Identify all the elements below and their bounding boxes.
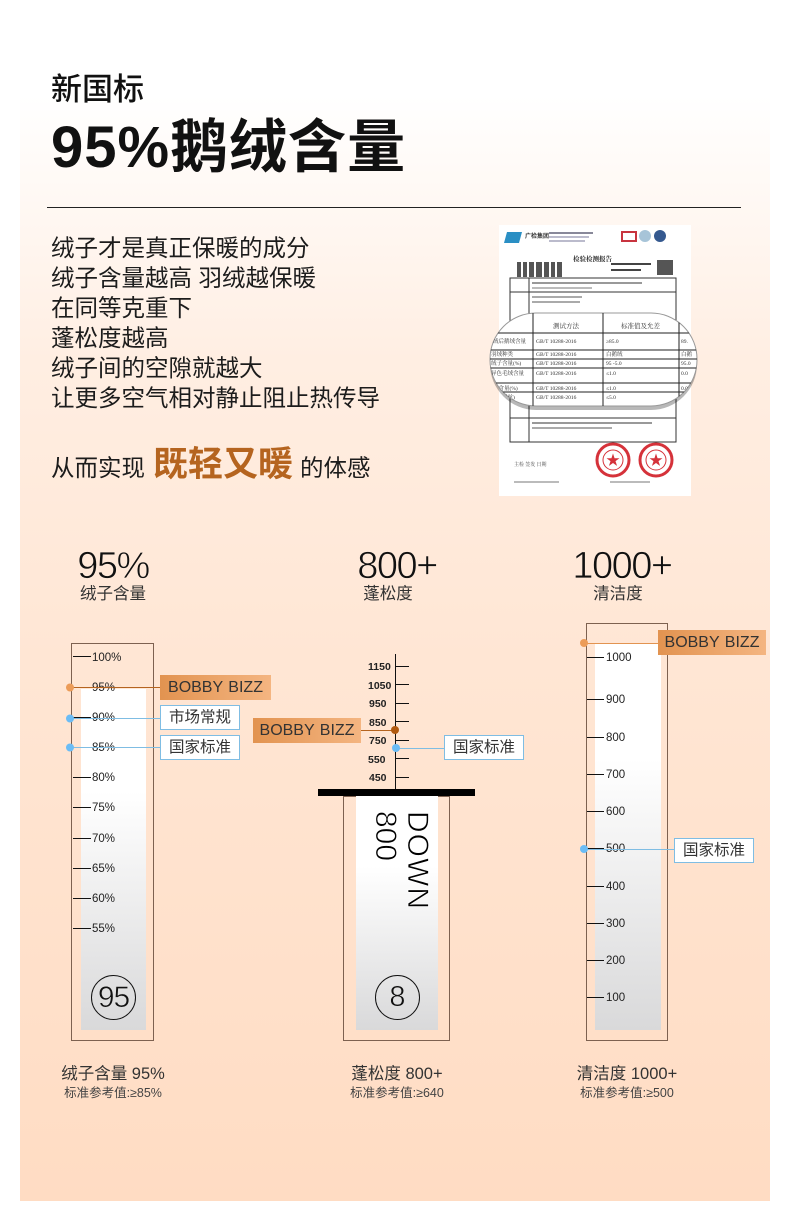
test report document: 绒子含量(%) [491,359,521,367]
gauge: cleanliness: BOBBY BIZZ [665,634,759,651]
text block: description [51,235,380,411]
test report document: 主检 签发 日期 [514,461,547,468]
gauge: down content: 75% [92,802,115,814]
callout: light and warm: 既轻又暖 [153,445,293,484]
caption: cleanliness [577,1064,677,1100]
test report document: 绒后鹅绒含量 [493,337,527,345]
test report document: GB/T 10288-2016 [536,339,577,345]
badge: 95 [91,975,136,1020]
stat: down content: 绒子含量 [80,585,146,603]
divider rule [47,207,741,208]
gauge: down content: 国家标准 [169,739,231,756]
gauge: down content: 65% [92,863,115,875]
test report document: 0.0 [681,371,688,377]
gauge: cleanliness: 1000 [606,652,632,664]
gauge: down content: 80% [92,772,115,784]
stat: down content: 95% [77,545,149,587]
gauge: down content: 市场常规 [169,709,231,726]
gauge: cleanliness: 400 [606,881,625,893]
callout: light and warm [51,445,370,484]
callout: light and warm: 的体感 [300,455,370,481]
test report document: 标准值及允差 [621,321,660,330]
caption: down content [61,1064,165,1100]
heading: main title: 95%鹅绒含量 [51,115,406,180]
gauge: fill power: 750 [369,735,387,747]
gauge: cleanliness: 900 [606,694,625,706]
gauge: cleanliness [580,623,766,1041]
gauge: cleanliness: 200 [606,955,625,967]
caption: cleanliness: 标准参考值:≥500 [580,1086,674,1100]
gauge: down content [66,643,271,1041]
test report document: ≤1.0 [606,371,616,377]
test report document: ★ [606,454,620,469]
test report document: 异色毛绒含量 [491,369,525,377]
text block: description: 绒子才是真正保暖的成分 [51,235,310,261]
gauge: down content: 70% [92,833,115,845]
bar: black cap [318,789,475,796]
stat: fill power: 800+ [357,545,437,587]
badge: 8: 8 [389,981,406,1013]
label: 800 vertical: 800 [369,811,402,861]
test report document: 羽绒种类 [491,350,514,358]
gauge: cleanliness: 100 [606,992,625,1004]
gauge: down content: 95% [92,682,115,694]
gauge: fill power: 450 [369,772,387,784]
gauge: down content: BOBBY BIZZ [168,679,263,696]
gauge: down content: 100% [92,652,121,664]
test report document: 白鹅绒 [606,350,623,358]
text block: description: 绒子含量越高 羽绒越保暖 [51,265,316,291]
gauge: cleanliness: 500 [606,843,625,855]
gauge: fill power: 550 [368,754,386,766]
test report document [490,225,698,496]
test report document: GB/T 10288-2016 [536,386,577,392]
gauge: down content: 60% [92,893,115,905]
text block: description: 蓬松度越高 [51,325,168,351]
stat: cleanliness: 1000+ [572,545,672,587]
gauge: cleanliness: 600 [606,806,625,818]
caption: down content: 标准参考值:≥85% [64,1086,162,1100]
gauge: fill power: BOBBY BIZZ [260,722,354,739]
badge: 95: 95 [98,981,129,1014]
gauge: down content: 55% [92,923,115,935]
test report document: GB/T 10288-2016 [536,361,577,367]
test report document: GB/T 10288-2016 [536,395,577,401]
test report document: 89. [681,339,688,345]
test report document: 广检集团 [525,232,549,240]
text block: description: 让更多空气相对静止阻止热传导 [51,385,380,411]
gauge: down content: 85% [92,742,115,754]
test report document: ★ [649,454,663,469]
test report document: 95.0 [681,361,691,367]
test report document: 白鹅 [681,350,693,358]
gauge: down content: 90% [92,712,115,724]
test report document: ≥85.0 [606,339,619,345]
stat: cleanliness: 清洁度 [593,585,643,603]
gauge: fill power [253,654,524,1041]
heading: small title: 新国标 [51,72,144,107]
gauge: cleanliness: 300 [606,918,625,930]
gauge: cleanliness: 700 [606,769,625,781]
gauge: fill power: 850 [369,717,387,729]
caption: fill power: 标准参考值:≥640 [350,1086,444,1100]
test report document: 测试方法 [553,321,580,330]
caption: fill power: 蓬松度 800+ [351,1065,443,1083]
gauge: cleanliness: 国家标准 [683,842,745,859]
test report document: 0.0 [681,386,688,392]
test report document: GB/T 10288-2016 [536,371,577,377]
caption: fill power [350,1064,444,1100]
gauge: fill power: 1150 [368,661,391,673]
caption: down content: 绒子含量 95% [61,1065,165,1083]
test report document: ≤5.0 [606,395,616,401]
gauge: fill power: 1050 [368,680,392,692]
text block: description: 在同等克重下 [51,295,192,321]
test report document: 毛含量(%) [493,384,518,392]
gauge: fill power: 950 [369,698,387,710]
test report document: 羽丝) [502,393,515,401]
test report document: 95 -5.0 [606,361,622,367]
test report document: ≤1.0 [606,386,616,392]
gauge: cleanliness: 800 [606,732,625,744]
gauge: fill power: 国家标准 [453,739,515,756]
test report document: 检验检测报告 [573,254,612,263]
callout: light and warm: 从而实现 [51,455,145,481]
caption: cleanliness: 清洁度 1000+ [577,1065,677,1083]
stat: fill power: 蓬松度 [363,585,413,603]
label: DOWN vertical: DOWN [401,811,434,910]
badge: 8 [375,975,420,1020]
test report document: GB/T 10288-2016 [536,352,577,358]
text block: description: 绒子间的空隙就越大 [51,355,262,381]
